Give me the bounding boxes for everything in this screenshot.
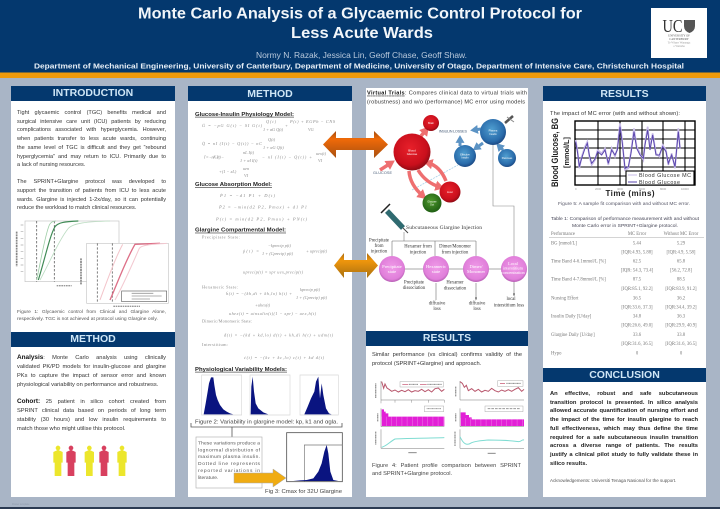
table 1 caption: Monte Carlo error in SPRINT+Glargine protocol. [572, 223, 678, 229]
heading: introduction: INTRODUCTION [53, 87, 133, 99]
gut node [422, 194, 442, 212]
chart: blood glucose over time: 4000 [617, 187, 624, 191]
text: results summary [372, 352, 522, 367]
text: intro paragraph 1: hyperglycemia” and may return to ICU. Primarily due to [17, 154, 166, 160]
effective insulin node [454, 145, 476, 167]
text: conclusion: transition protocol is presented. In silico analysis [550, 400, 698, 406]
equations: glargine compartments: Hexameric State: [202, 284, 238, 290]
text: intro paragraph 1: Tight glycaemic control (TGC) benefits medical and [17, 110, 166, 116]
equations: glucose-insulin: 1 + αI I(t) [240, 158, 258, 163]
legend [626, 171, 694, 186]
affiliations: Department of Mechanical Engineering, University of Canterbury, Department of Medicine, University of Otago, Department of Intensive Care, Christchurch Hospital [34, 62, 684, 70]
heading: conclusion: CONCLUSION [589, 369, 660, 381]
node: local interstitium: Local [508, 261, 519, 266]
equations: glucose-insulin: Q(t) [268, 137, 276, 142]
diagram: glucose-insulin physiology [373, 115, 516, 212]
figure 1 caption: respectively. TGC is not achieved at protocol using Glargine only. [17, 317, 158, 322]
title [138, 6, 582, 42]
diagram: glargine compartments: injection [410, 250, 427, 256]
diagram: glargine compartments: from injection [442, 250, 469, 256]
equations: glucose-insulin [202, 119, 336, 178]
table: performance comparison: 36.5 [633, 296, 642, 301]
table: performance comparison: [IQR:34.4, 39.2] [665, 305, 697, 310]
effective insulin node: Insulin [461, 156, 469, 160]
liver node [440, 182, 460, 202]
diagram: glargine compartments [369, 225, 527, 312]
text: conclusion: justify a clinical pilot study to fully validate these in [550, 452, 698, 458]
brain node [423, 115, 439, 131]
equations: glargine compartments: ṗ(t) = [242, 248, 259, 254]
pancreas node: Pancreas [502, 157, 513, 160]
logo: University of Canterbury: UC [662, 16, 682, 36]
table: performance comparison: Nursing Effort [551, 296, 579, 301]
diagram: glargine compartments: Dimer/Monomer [439, 244, 471, 250]
table: performance comparison: Without MC Error [664, 232, 699, 237]
node: hexameric state: Hexameric [426, 264, 446, 269]
text: conclusion [550, 391, 698, 467]
SPRINT+Glargine profile charts [455, 381, 524, 453]
equations: glucose-insulin: VI [244, 173, 249, 178]
diagram: glargine compartments: diffusive [429, 302, 445, 306]
brain node: Brain [428, 122, 435, 125]
callout: lognormal note: reported variations in [198, 468, 260, 474]
text: cohort: Cohort: 25 patient in silico cohort created from [17, 398, 166, 405]
heading: glargine compartmental model: Glargine Compartmental Model: [195, 228, 286, 234]
table: performance comparison: Insulin Daily [U/day] [551, 315, 592, 320]
callout: lognormal note: literature. [198, 475, 218, 481]
figure 1 caption: Figure 1: Glycaemic control from Clinical and Glargine Alone, [17, 310, 166, 314]
table: performance comparison: 87.5 [633, 278, 642, 283]
label: subcutaneous injection: Subcutaneous Glargine Injection [406, 225, 482, 231]
text: virtual trials: (robustness) and w/o (performance) MC error using models [367, 100, 525, 106]
table: performance comparison: [IQR:31.6, 36.5] [621, 342, 653, 347]
diagram: glargine compartments: injection [371, 250, 388, 254]
table: performance comparison: [IQR:26.6, 49.0] [621, 324, 653, 329]
equations: glucose-insulin: Q(t) [266, 119, 277, 124]
blood glucose node: Glucose [407, 152, 418, 156]
logo: University of Canterbury: CANTERBURY [669, 37, 690, 41]
text: intro paragraph 2: support the transition of patients from ICU to less acute [17, 188, 166, 194]
equations: glucose-insulin: VG [308, 127, 315, 132]
text: intro paragraph 2: reduce the workload to match clinical resources. [17, 205, 136, 211]
equations: glargine compartments [202, 234, 334, 361]
table: performance comparison [549, 232, 704, 356]
bracket [191, 423, 342, 437]
chart: blood glucose over time [550, 118, 695, 198]
SPRINT profile charts [376, 381, 444, 453]
table: performance comparison: Time Band 4-7.8mmol/L [%] [551, 278, 606, 283]
title: Monte Carlo Analysis of a Glycaemic Control Protocol for [138, 6, 582, 22]
equations: glucose-insulin: VI [318, 158, 323, 163]
panel: conclusion [543, 368, 706, 497]
liver node: Liver [447, 190, 453, 194]
figure 4 caption [372, 462, 521, 477]
footer small print: Poster template [12, 503, 30, 506]
diagram: glargine compartments: dissociation [444, 286, 467, 292]
equations: glargine compartments: Precipitate State: [202, 234, 240, 240]
table: performance comparison: 36.2 [677, 296, 686, 301]
glargine cdf chart [81, 243, 168, 306]
heading: glucose absorption model: Glucose Absorption Model: [195, 182, 272, 188]
panel: method (models) [188, 86, 352, 497]
figure 3: Cmax histogram [287, 433, 342, 482]
table: performance comparison: [IQR:85.1, 92.2] [621, 287, 653, 292]
equations: glargine compartments: ḣ(t) = −(kh,di + kh,lo) h(t) + [226, 291, 292, 297]
panel: results lower [366, 331, 528, 497]
table: performance comparison: 0 [680, 351, 683, 356]
pancreas node [498, 149, 516, 167]
heading: results: RESULTS [423, 332, 471, 344]
equations: glargine compartments: Dimeric/Monomeric State: [202, 318, 252, 324]
plasma insulin node: Plasma [489, 128, 498, 132]
label: insulin losses: INSULIN LOSSES [439, 130, 467, 134]
text: conclusion: across a diverse range of patients. The results [550, 443, 698, 449]
title: Less Acute Wards [291, 25, 433, 42]
table: performance comparison: [IQR:83.9, 91.2] [665, 287, 697, 292]
diagram: glargine compartments: diffusive [469, 302, 485, 306]
table: performance comparison: [IQR:33.6, 37.3] [621, 305, 653, 310]
equations: glargine compartments: kprecip p(t) [300, 287, 321, 292]
heading: results [366, 331, 528, 346]
diagram: glargine compartments: Hexamer [446, 280, 464, 286]
equations: glargine compartments: + uprecip(t) [306, 248, 328, 254]
text: analysis: PKs to capture the impact of sensor error and known [17, 373, 166, 379]
table 1 caption: Table 1: Comparison of performance measurement with and without [551, 216, 700, 222]
table: performance comparison: Time Band 4-6.1mmol/L [%] [551, 260, 606, 265]
arrow: links physiology equations to diagram [323, 131, 388, 158]
logo: University of Canterbury: o Waitaha [673, 44, 685, 48]
figure 2: three histograms [202, 375, 338, 415]
equations: glucose absorption [215, 193, 308, 222]
panel: virtual trials and model diagrams [366, 88, 528, 331]
diagram: glargine compartments: loss [433, 307, 441, 312]
callout: lognormal note: Dotted line represents [198, 461, 261, 467]
table: performance comparison: 36.3 [677, 315, 686, 320]
node: precipitate state [379, 256, 405, 282]
equations: glargine compartments: Interstitium: [202, 342, 228, 347]
table: performance comparison: 0 [636, 351, 639, 356]
heading: conclusion [543, 368, 706, 382]
heading: physiological variability: Physiological Variability Models: [195, 367, 287, 373]
heading: results: RESULTS [600, 88, 649, 100]
table: performance comparison: 5.29 [677, 241, 686, 246]
plasma insulin node [480, 119, 506, 145]
table: performance comparison: [IQR:4.93, 5.88] [621, 250, 653, 255]
table 1 caption [551, 216, 700, 229]
legend: Blood Glucose [639, 180, 680, 186]
text: intro paragraph 1: the same level of TGC is difficult and they get “rebound [17, 145, 166, 151]
text: results summary: Similar performance (vs clinical) confirms validity of the [372, 352, 522, 358]
equations: glucose-insulin: uex(t) [316, 151, 327, 156]
equations: glargine compartments: ḋ(t) = −(kd + kd,lo) d(t) + kh,di h(t) + udm(t) [224, 332, 334, 338]
chart: blood glucose over time: 2000 [595, 187, 602, 191]
equations: glargine compartments: uhex(t) = uinsulin(t)(1 − xpr) − uex,h(t) [229, 311, 317, 317]
text: intro paragraph 1: a lack of nursing resources. [17, 162, 85, 168]
text: intro paragraph 2 [17, 179, 166, 211]
equations: glargine compartments: ċ(t) = −(kc + kc,lo) c(t) + kd d(t) [244, 355, 325, 361]
diagram: glargine compartments: Precipitate [369, 238, 389, 244]
equations: glucose-insulin: 1 + αG Q(t) [263, 145, 284, 150]
text: cohort: stability (30 hours) and low insulin requirements to [17, 417, 166, 423]
callout: lognormal note: maximum plasma insulin. [198, 454, 260, 460]
panel: introduction [11, 86, 175, 332]
equations: glucose-insulin: İ = −nK I(t) − [203, 154, 224, 160]
text: conclusion: allowed accurate quantification of nursing effort and [550, 408, 698, 414]
callout: lognormal note: These variations produce a [198, 440, 260, 446]
table: performance comparison: 88.5 [677, 278, 686, 283]
clinical cdf chart [17, 221, 119, 286]
figure 4 caption: Figure 4: Patient profile comparison between SPRINT [372, 462, 521, 468]
heading: introduction [11, 86, 175, 101]
node: dimer monomer [463, 256, 489, 282]
text: intro paragraph 2: The SPRINT+Glargine protocol was developed to [17, 179, 166, 185]
figure 4 caption: and SPRINT+Glargine protocol. [372, 471, 452, 477]
text: cohort: match those who might utilise this protocol. [17, 426, 125, 432]
chart: blood glucose over time: 0 [575, 187, 577, 191]
table: performance comparison: [IQR:29.9, 40.9] [665, 324, 697, 329]
heading: method: METHOD [70, 333, 116, 345]
chart: patient profile comparison [375, 380, 524, 454]
table: performance comparison: 34.8 [633, 315, 642, 320]
callout: lognormal note: lognormal distribution of [198, 448, 261, 454]
equations: glucose-insulin: nL I(t) [243, 150, 255, 155]
text: analysis [17, 354, 166, 388]
node: local interstitium [501, 256, 527, 282]
text: intro paragraph 1 [17, 110, 166, 168]
text: intro paragraph 1: complications associated with hyperglycemia. However, [17, 127, 166, 133]
text: cohort [17, 398, 166, 432]
equations: glucose absorption: Ṗ2 = −min(d2 P2, Pmax) + d1 P1 [218, 204, 307, 210]
equations: glucose-insulin: + [285, 123, 288, 128]
equations: glucose-insulin: Ġ = −pG G(t) − SI G(t) [202, 123, 263, 128]
diagram: glargine compartments: interstitium loss [494, 304, 524, 308]
text: cohort: SPRINT clinical data based on periods of long term [17, 408, 166, 414]
diagram: glargine compartments: Hexamer from [404, 244, 432, 250]
gut node: Glucose [427, 200, 437, 204]
table: performance comparison: 33.8 [677, 333, 686, 338]
text: conclusion: the impact of the time for insulin glargine to reach [550, 417, 698, 423]
logo: University of Canterbury: UNIVERSITY OF [668, 34, 690, 38]
legend: Blood Glucose MC [639, 173, 691, 179]
table: performance comparison: 65.8 [677, 260, 686, 265]
node: dimer monomer: Monomer [467, 269, 486, 274]
node: dimer monomer: Dimer/ [469, 264, 483, 269]
equations: glargine compartments: 1 + (Cprecip) p(t) [262, 251, 294, 256]
logo: University of Canterbury [651, 8, 707, 58]
arrow: to Cmax chart [234, 469, 286, 487]
table: performance comparison: Performance [551, 232, 575, 237]
heading: method [11, 332, 175, 347]
equations: glargine compartments: +uhex(t) [255, 302, 271, 308]
figure 1 caption [17, 310, 166, 322]
node: precipitate state: state [388, 269, 396, 274]
table: performance comparison: 62.5 [633, 260, 642, 265]
icon: small syringe [505, 116, 513, 123]
authors: Normy N. Razak, Jessica Lin, Geoff Chase, Geoff Shaw. [256, 51, 467, 60]
text: intro paragraph 1: when patients transfer to less acute wards, continuing [17, 136, 166, 142]
node: hexameric state [423, 256, 449, 282]
text: intro paragraph 2: wards. Glargine is injected 1-2x/day, so it can potentially [17, 197, 166, 203]
x axis label: Time (mins) [606, 189, 655, 198]
y axis label: Blood Glucose, BG [550, 118, 560, 187]
chart: blood glucose over time: 8000 [660, 187, 667, 191]
heading: glucose-insulin model: Glucose-Insulin Physiology Model: [195, 112, 294, 118]
icon: syringe [381, 204, 408, 233]
footer strip [0, 507, 720, 509]
arrow: links glargine equations to diagram [334, 253, 378, 278]
chart: blood glucose over time: 6000 [639, 187, 646, 191]
figure 2 caption: Figure 2: Variability in glargine model: kp, k1 and αgla. [195, 420, 338, 426]
header banner [0, 0, 720, 78]
table: performance comparison: [56.2, 72.8] [670, 269, 692, 274]
table: performance comparison: 5.44 [633, 241, 642, 246]
figure 5 caption: Figure 5: A sample fit comparison with and without MC error. [558, 201, 690, 207]
text: conclusion: silico results. [550, 461, 587, 467]
equations: glucose-insulin: Q̇ = nI (I(t) − Q(t)) − nC [202, 141, 262, 146]
text: conclusion: required for a safe subcutaneous insulin transition [550, 435, 698, 441]
panel: method (analysis and cohort) [11, 332, 175, 497]
text: analysis: Analysis: Monte Carlo analysis using clinically [17, 354, 166, 361]
gut node: Gut [430, 204, 434, 206]
text: virtual trials: Virtual Trials: Compares clinical data to virtual trials with [367, 91, 527, 97]
equations: glargine compartments: uprecip(t) = xpr uex,precip(t) [243, 270, 304, 276]
equations: glucose absorption: Ṗ1 = −d1 P1 + D(t) [219, 193, 276, 198]
text: conclusion: An effective, robust and safe subcutaneous [550, 391, 698, 397]
diagram: glargine compartments: dissociation [403, 286, 426, 291]
text: impact of MC error: The impact of MC error (with and without shown): [550, 111, 680, 117]
icon: five patients [53, 446, 127, 476]
effective insulin node: Effective [460, 154, 470, 156]
blood glucose node [394, 134, 430, 170]
diagram: glargine compartments: Precipitate [404, 280, 424, 286]
text: analysis: physiological variability on performance and robustness. [17, 382, 158, 388]
text: acknowledgements: Acknowledgements: Universiti Tenaga Nasional for the support. [550, 478, 676, 483]
callout: lognormal note [196, 437, 262, 488]
chart: blood glucose over time: 10000 [681, 187, 689, 191]
node: hexameric state: state [432, 269, 440, 274]
figure 3 caption: Fig 3: Cmax for 32U Glargine [265, 489, 342, 495]
diagram: glargine compartments: local [506, 297, 516, 302]
node: precipitate state: Precipitate [382, 264, 402, 269]
text: intro paragraph 1: surgical intensive care unit (ICU) patients by reducing [17, 119, 166, 125]
equations: glucose-insulin: − nI (I(t) − Q(t)) + [262, 154, 312, 160]
table: performance comparison: BG [mmol/L] [551, 241, 577, 246]
table: performance comparison: MC Error [628, 232, 647, 237]
equations: glargine compartments: −kprecip p(t) [268, 243, 291, 248]
table: performance comparison: Hypo [551, 351, 562, 356]
equations: glucose-insulin: +(1 − xL) [219, 169, 237, 174]
chart: glycaemic control CDFs [16, 220, 169, 307]
node: local interstitium: interstitium [503, 266, 524, 270]
equations: glucose-insulin: uen [243, 166, 249, 171]
text: conclusion: full effectiveness, which may thus define the time [550, 426, 698, 432]
node: local interstitium: concentration [501, 270, 526, 275]
plasma insulin node: Insulin [489, 132, 497, 136]
diagram: glargine compartments: from [374, 244, 384, 249]
table: performance comparison: [IQR:31.6, 36.5] [665, 342, 697, 347]
blood glucose node: Blood [408, 148, 416, 152]
heading: method: METHOD [247, 88, 293, 100]
table: performance comparison: [IQR:4.9, 5.58] [667, 250, 696, 255]
chart: blood glucose over time: [mmol/L] [562, 137, 571, 168]
connector: interstitium to plasma [493, 145, 514, 257]
text: results summary: protocol (SPRINT+Glargine) and approach. [372, 361, 481, 367]
table: performance comparison: [IQR: 54.3, 73.4] [621, 269, 654, 274]
text: analysis: validated PK/PD models for insulin-glucose and glargine [17, 364, 166, 370]
equations: glargine compartments: 1 + (Cprecip) p(t) [296, 295, 328, 300]
text: virtual trials [367, 91, 527, 106]
panel: results right [543, 86, 706, 368]
equations: glucose-insulin: P(t) + EGPb − CNS [289, 119, 336, 124]
equations: glucose absorption: P(t) = min(d2 P2, Pmax) + PN(t) [215, 216, 308, 222]
logo: University of Canterbury: Te Whare Wananga [668, 40, 691, 44]
table: performance comparison: 33.6 [633, 333, 642, 338]
table: performance comparison: Glargine Daily [U/day] [551, 333, 595, 338]
diagram: glargine compartments: loss [473, 307, 481, 312]
label: glucose: GLUCOSE [373, 171, 392, 175]
equations: glucose-insulin: 1 + αG Q(t) [263, 127, 284, 132]
